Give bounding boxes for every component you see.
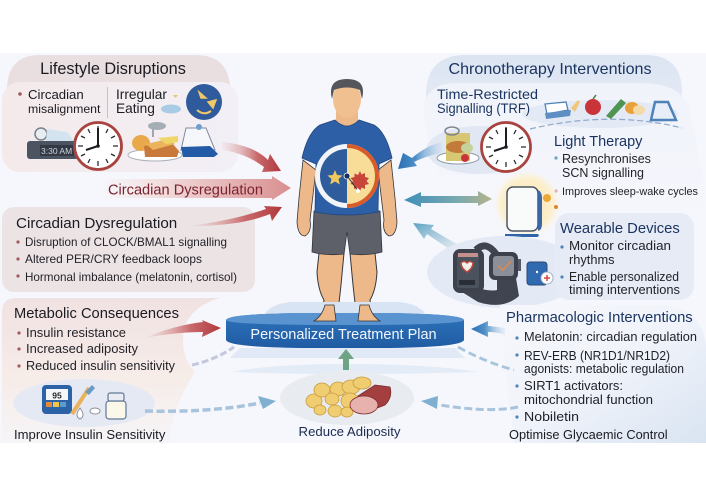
icon: strip of lifestyle items [545,95,676,120]
heading: Metabolic Consequences [14,306,179,322]
arrow: lifestyle to dysregulation [222,142,281,172]
bullet list: Reduced insulin sensitivity [26,358,176,373]
bullet list: Disruption of CLOCK/BMAL1 signalling [25,235,227,249]
bullet list: REV-ERB (NR1D1/NR1D2) [524,349,670,363]
bullet list: Insulin resistance [26,325,126,340]
text: irregular eating: Irregular [116,87,167,102]
subheading: time-restricted: Time-Restricted [437,87,538,103]
icon: light therapy lamp [493,170,561,238]
band: circadian dysregulation [100,176,291,200]
text: irregular eating: Eating [116,101,155,116]
icon: smartwatch [453,246,521,305]
arrow: dashed glycaemic to adiposity [421,396,518,410]
icon: wall clock [74,122,122,170]
panel: wearable devices [427,213,694,308]
icon: wall clock [482,122,530,172]
group: reduce adiposity [280,371,414,439]
bullet list: Hormonal imbalance (melatonin, cortisol) [25,270,237,284]
heading: Wearable Devices [560,221,680,237]
icon: glucometer [42,385,72,414]
icon: meal plate [128,122,182,161]
panel: circadian dysregulation [2,207,255,292]
subheading: time-restricted [437,87,538,117]
bullet list: Monitor circadian [569,238,671,253]
t-shirt [302,120,392,215]
person [297,79,397,321]
bullet list: mitochondrial function [524,393,653,407]
label: Optimise Glycaemic Control [509,427,668,442]
text: irregular eating [116,87,167,116]
bullet list [560,238,680,297]
feet [314,305,380,321]
bullet: circadian misalignment: misalignment [28,102,101,116]
arrow: light therapy double arrow [404,191,492,207]
bullet list: Melatonin: circadian regulation [524,330,697,344]
bullet list: Enable personalized [569,269,679,284]
bullet list [17,325,176,373]
icon: glucometer: 95 [52,390,62,400]
icon: dropper [72,385,100,419]
text: light therapy: Light Therapy [554,134,643,150]
icon: moon clock [161,84,222,120]
heading: Chronotherapy Interventions [448,60,652,78]
heading: Circadian Dysregulation [16,215,177,232]
bullet list: rhythms [569,252,615,267]
panel: lifestyle disruptions [2,55,238,172]
icon: sun [350,171,369,191]
icon: food bowl [437,127,479,164]
icon: tablet with plus [527,262,553,285]
icon: pill bottle [106,393,126,419]
panel: pharmacologic interventions [500,305,706,443]
bullet list: Nobiletin [524,410,579,424]
icon: alarm clock: 3:30 AM [41,146,72,156]
legs [314,253,380,321]
arrow: insulin to adiposity [145,396,276,411]
bullet: circadian misalignment [18,87,101,116]
bullet list: Altered PER/CRY feedback loops [25,252,202,266]
label: Improve Insulin Sensitivity [14,427,166,442]
bullet list: timing interventions [569,282,680,297]
icon: star [328,170,342,184]
text: light therapy [554,134,698,198]
panel: personalized treatment plan [226,302,478,374]
neck and head [336,108,358,128]
bullet list: SIRT1 activators: [524,379,623,393]
arrow: adiposity to plan [338,349,354,370]
icon: scale device [181,124,218,157]
arrow: dysregulation panel to body [190,206,282,226]
bullet list: Increased adiposity [26,341,139,356]
panel: metabolic consequences [2,298,220,443]
label: Reduce Adiposity [299,424,401,439]
band: circadian dysregulation: Circadian Dysregulation [108,182,263,198]
shorts [312,211,382,255]
arrow: dashed metabolic feedback [192,347,234,365]
icon: alarm clock [27,128,79,159]
background panel [0,53,706,443]
group: insulin sensitivity [13,379,166,442]
bullet list: agonists: metabolic regulation [524,362,684,376]
arrow: metabolic to plan [145,320,221,338]
text: light therapy: Improves sleep-wake cycles [562,186,698,198]
icon: fat cells and meat [306,377,391,417]
chart: clock on belly [315,144,379,208]
bullet list [515,330,697,424]
arrow: wearable to body [413,223,460,251]
heading: Pharmacologic Interventions [506,310,693,326]
bullet list [16,235,237,284]
arrow: dashed plan to pharmacologic [458,347,514,370]
heading: lifestyle disruptions: Lifestyle Disruptions [40,60,186,78]
panel: chronotherapy interventions [424,55,705,210]
subheading: time-restricted: Signalling (TRF) [437,101,530,117]
arrow: pharmacologic to plan [471,321,505,337]
text: light therapy: Resynchronises [562,152,651,166]
label: Personalized Treatment Plan [250,327,437,343]
arrow: TRF to body [398,142,442,169]
text: light therapy: SCN signalling [562,166,644,180]
bullet: circadian misalignment: Circadian [28,87,84,102]
arms [297,160,316,236]
